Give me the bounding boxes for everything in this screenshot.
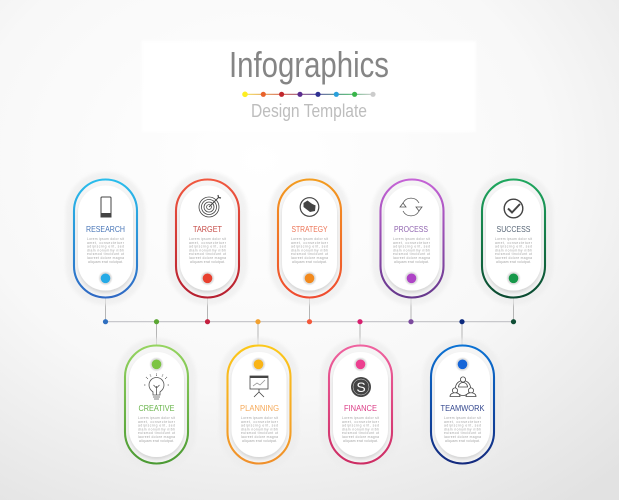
body text: amet, consectetuer bbox=[291, 241, 329, 245]
body text: diam nonummy nibh bbox=[291, 248, 328, 252]
label: TARGET bbox=[193, 224, 223, 234]
card: target bbox=[168, 172, 248, 305]
body text: laoreet dolore magna bbox=[138, 435, 175, 439]
body text: aliquam erat volutpat. bbox=[394, 260, 429, 264]
marker dot bbox=[405, 272, 418, 285]
body text: amet, consectetuer bbox=[393, 241, 431, 245]
body text: aliquam erat volutpat. bbox=[190, 260, 225, 264]
label: CREATIVE bbox=[138, 403, 175, 413]
label: RESEARCH bbox=[86, 224, 125, 234]
body text: amet, consectetuer bbox=[444, 420, 482, 424]
body text: Lorem ipsum dolor sit bbox=[393, 237, 430, 241]
body text bbox=[189, 237, 227, 264]
icon: strategy badge bbox=[300, 198, 319, 216]
body text: euismod tincidunt ut bbox=[87, 252, 124, 256]
body text: Lorem ipsum dolor sit bbox=[87, 237, 124, 241]
body text: euismod tincidunt ut bbox=[495, 252, 532, 256]
card: creative bbox=[116, 338, 196, 471]
body text: euismod tincidunt ut bbox=[444, 431, 481, 435]
card: strategy bbox=[270, 172, 350, 305]
label: SUCCESS bbox=[496, 224, 531, 234]
marker dot bbox=[150, 358, 163, 371]
body text: Lorem ipsum dolor sit bbox=[189, 237, 226, 241]
body text: diam nonummy nibh bbox=[189, 248, 226, 252]
colored dot line bbox=[242, 92, 376, 97]
body text: euismod tincidunt ut bbox=[342, 431, 379, 435]
timeline bbox=[103, 296, 516, 347]
body text: laoreet dolore magna bbox=[87, 256, 124, 260]
marker dot bbox=[456, 358, 469, 371]
body text: amet, consectetuer bbox=[342, 420, 380, 424]
body text: Lorem ipsum dolor sit bbox=[342, 416, 379, 420]
icon: light bulb bbox=[144, 374, 169, 399]
label: PLANNING bbox=[240, 403, 279, 413]
body text: diam nonummy nibh bbox=[241, 427, 278, 431]
icon: team of three bbox=[450, 377, 476, 396]
card: process bbox=[372, 172, 452, 305]
label: STRATEGY bbox=[292, 224, 328, 234]
body text: Lorem ipsum dolor sit bbox=[444, 416, 481, 420]
marker dot bbox=[99, 272, 112, 285]
icon: cycle arrows bbox=[400, 198, 422, 216]
icon: target bbox=[199, 195, 221, 217]
card: teamwork bbox=[422, 338, 502, 471]
marker dot bbox=[303, 272, 316, 285]
subtitle: Design Template bbox=[251, 101, 367, 121]
body text: euismod tincidunt ut bbox=[393, 252, 430, 256]
body text: diam nonummy nibh bbox=[87, 248, 124, 252]
marker dot bbox=[252, 358, 265, 371]
card: success bbox=[474, 172, 554, 305]
body text: laoreet dolore magna bbox=[495, 256, 532, 260]
body text bbox=[342, 416, 380, 443]
body text bbox=[138, 416, 176, 443]
icon: check mark bbox=[504, 199, 523, 218]
title panel bbox=[142, 41, 476, 132]
body text: Lorem ipsum dolor sit bbox=[291, 237, 328, 241]
body text: laoreet dolore magna bbox=[393, 256, 430, 260]
body text: laoreet dolore magna bbox=[444, 435, 481, 439]
body text: aliquam erat volutpat. bbox=[88, 260, 123, 264]
body text: euismod tincidunt ut bbox=[241, 431, 278, 435]
marker dot bbox=[201, 272, 214, 285]
label: PROCESS bbox=[394, 224, 428, 234]
body text bbox=[87, 237, 125, 264]
body text: euismod tincidunt ut bbox=[291, 252, 328, 256]
body text bbox=[444, 416, 482, 443]
icon: presentation board bbox=[250, 376, 268, 397]
body text: adipiscing elit, sed bbox=[393, 245, 430, 249]
body text: adipiscing elit, sed bbox=[189, 245, 226, 249]
body text: amet, consectetuer bbox=[138, 420, 176, 424]
body text: amet, consectetuer bbox=[87, 241, 125, 245]
body text: adipiscing elit, sed bbox=[241, 424, 278, 428]
body text: Lorem ipsum dolor sit bbox=[138, 416, 175, 420]
body text: diam nonummy nibh bbox=[138, 427, 175, 431]
body text: laoreet dolore magna bbox=[342, 435, 379, 439]
icon: phone bbox=[101, 197, 111, 217]
label: TEAMWORK bbox=[440, 403, 485, 413]
body text bbox=[495, 237, 533, 264]
marker dot bbox=[507, 272, 520, 285]
body text: adipiscing elit, sed bbox=[342, 424, 379, 428]
body text: adipiscing elit, sed bbox=[138, 424, 175, 428]
body text: laoreet dolore magna bbox=[241, 435, 278, 439]
body text bbox=[241, 416, 279, 443]
body text: aliquam erat volutpat. bbox=[292, 260, 327, 264]
body text: amet, consectetuer bbox=[189, 241, 227, 245]
body text: diam nonummy nibh bbox=[495, 248, 532, 252]
body text: laoreet dolore magna bbox=[189, 256, 226, 260]
body text: euismod tincidunt ut bbox=[138, 431, 175, 435]
body text: adipiscing elit, sed bbox=[87, 245, 124, 249]
body text: amet, consectetuer bbox=[495, 241, 533, 245]
body text: aliquam erat volutpat. bbox=[445, 439, 480, 443]
body text: diam nonummy nibh bbox=[393, 248, 430, 252]
body text: adipiscing elit, sed bbox=[444, 424, 481, 428]
body text: diam nonummy nibh bbox=[444, 427, 481, 431]
body text: euismod tincidunt ut bbox=[189, 252, 226, 256]
card: research bbox=[66, 172, 146, 305]
body text: Lorem ipsum dolor sit bbox=[495, 237, 532, 241]
title: Infographics bbox=[229, 44, 389, 85]
card: planning bbox=[219, 338, 299, 471]
body text: aliquam erat volutpat. bbox=[139, 439, 174, 443]
body text bbox=[291, 237, 329, 264]
label: FINANCE bbox=[344, 403, 377, 413]
body text: adipiscing elit, sed bbox=[291, 245, 328, 249]
icon: dollar coin: S bbox=[356, 379, 366, 395]
body text: Lorem ipsum dolor sit bbox=[241, 416, 278, 420]
body text: diam nonummy nibh bbox=[342, 427, 379, 431]
marker dot bbox=[354, 358, 367, 371]
body text: aliquam erat volutpat. bbox=[242, 439, 277, 443]
body text: amet, consectetuer bbox=[241, 420, 279, 424]
body text bbox=[393, 237, 431, 264]
body text: adipiscing elit, sed bbox=[495, 245, 532, 249]
card: finance bbox=[320, 338, 400, 471]
body text: laoreet dolore magna bbox=[291, 256, 328, 260]
body text: aliquam erat volutpat. bbox=[343, 439, 378, 443]
body text: aliquam erat volutpat. bbox=[496, 260, 531, 264]
